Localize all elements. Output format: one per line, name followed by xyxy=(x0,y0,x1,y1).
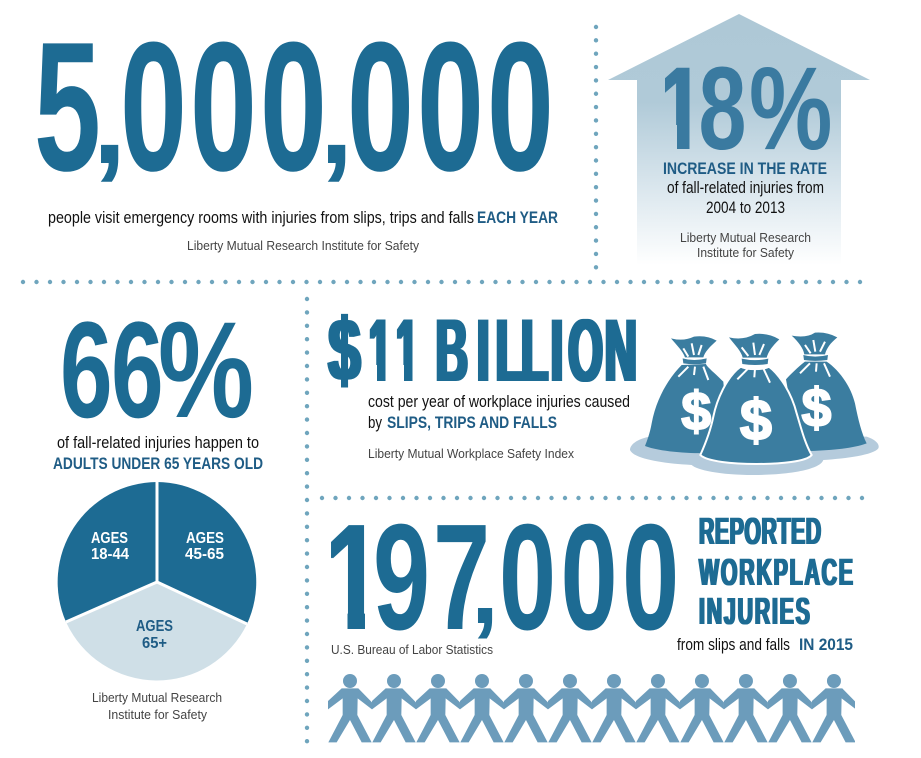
icon: house arrow xyxy=(608,14,870,266)
stat: 66%: % xyxy=(158,294,254,447)
source: Liberty Mutual Research xyxy=(680,231,811,245)
text: from slips and falls: IN 2015 xyxy=(799,635,853,654)
text: cost per year: SLIPS, TRIPS AND FALLS xyxy=(387,413,557,432)
stat: $11 billion: $ xyxy=(328,301,360,401)
stat: 5,000,000: 000 xyxy=(347,3,554,209)
heading: increase: INCREASE IN THE RATE xyxy=(663,159,827,178)
stat: 18% xyxy=(665,66,830,150)
stat: 66%: 66 xyxy=(60,292,164,446)
label: ages 18-44: AGES xyxy=(91,530,128,547)
icon: money bags xyxy=(630,333,879,475)
stat: 197,000: , xyxy=(471,533,499,645)
back-right bag xyxy=(786,333,867,451)
source: BLS: U.S. Bureau of Labor Statistics xyxy=(331,643,493,657)
heading: reported workplace injuries: INJURIES xyxy=(699,589,810,633)
stat: 5,000,000: 000 xyxy=(120,3,327,209)
label: ages 65+: AGES xyxy=(136,618,173,635)
stat: 197,000: 000 xyxy=(499,493,679,662)
stat: 18%: 8 xyxy=(698,42,746,174)
stat: 18%: % xyxy=(749,43,832,174)
heading: reported workplace injuries: REPORTED xyxy=(699,509,821,553)
stat: 5,000,000 xyxy=(34,3,554,209)
stat: 66% xyxy=(60,292,254,447)
icon: money bags: $ xyxy=(740,388,772,452)
stat: 5,000,000: 5 xyxy=(34,3,101,209)
label: ages 45-65: AGES xyxy=(186,530,224,547)
text: fall-related injuries: 2004 to 2013 xyxy=(706,198,785,217)
pie chart xyxy=(58,480,256,680)
source: Liberty Mutual: Liberty Mutual Research Institute for Safety xyxy=(187,239,420,253)
label: ages 65+: 65+ xyxy=(142,635,167,652)
icon: row of people xyxy=(328,674,856,742)
stat: 5,000,000: , xyxy=(320,53,353,189)
text: emergency rooms: EACH YEAR xyxy=(477,208,558,227)
stat: 18%: 1 xyxy=(657,42,705,174)
text: cost per year: cost per year of workplace injuries caused xyxy=(368,392,630,411)
shadow xyxy=(630,437,879,475)
source: pie: Liberty Mutual Research xyxy=(92,691,222,705)
icon: money bags: $ xyxy=(802,379,831,438)
heading: adults: ADULTS UNDER 65 YEARS OLD xyxy=(53,454,263,473)
back-left bag xyxy=(645,336,727,453)
source: pie xyxy=(92,691,222,722)
label: ages 65+ xyxy=(136,618,173,652)
stat: 5,000,000: , xyxy=(92,53,126,189)
text: from slips and falls: from slips and falls xyxy=(677,635,790,654)
text: fall-related injuries xyxy=(667,178,824,217)
stat: $11 billion xyxy=(327,314,636,388)
source: Institute for Safety xyxy=(697,246,795,260)
label: ages 18-44: 18-44 xyxy=(91,546,129,563)
label: ages 18-44 xyxy=(91,530,129,563)
source xyxy=(680,231,811,260)
text: fall-related injuries: of fall-related injuries from xyxy=(667,178,824,197)
source: index: Liberty Mutual Workplace Safety Index xyxy=(368,447,575,461)
text: emergency rooms: people visit emergency rooms with injuries from slips, trips and falls xyxy=(48,208,474,227)
stat: 197,000 xyxy=(331,524,675,638)
text: cost per year: by xyxy=(368,413,382,432)
source: pie: Institute for Safety xyxy=(108,708,208,722)
label: ages 45-65 xyxy=(185,530,224,563)
text: cost per year xyxy=(368,392,630,432)
stat: $11 billion: 11 xyxy=(369,301,418,400)
heading: reported workplace injuries xyxy=(699,509,853,633)
text: fall-related injuries: of fall-related injuries happen to xyxy=(57,433,259,452)
icon: money bags: $ xyxy=(681,382,711,441)
front bag xyxy=(700,334,812,464)
stat: 197,000: 1 xyxy=(325,493,382,662)
heading: reported workplace injuries: WORKPLACE xyxy=(699,550,853,594)
stat: $11 billion: BILLION xyxy=(436,300,637,400)
panel: house arrow 18% xyxy=(608,14,870,266)
label: ages 45-65: 45-65 xyxy=(185,546,224,563)
stat: 197,000: 97 xyxy=(373,493,490,662)
